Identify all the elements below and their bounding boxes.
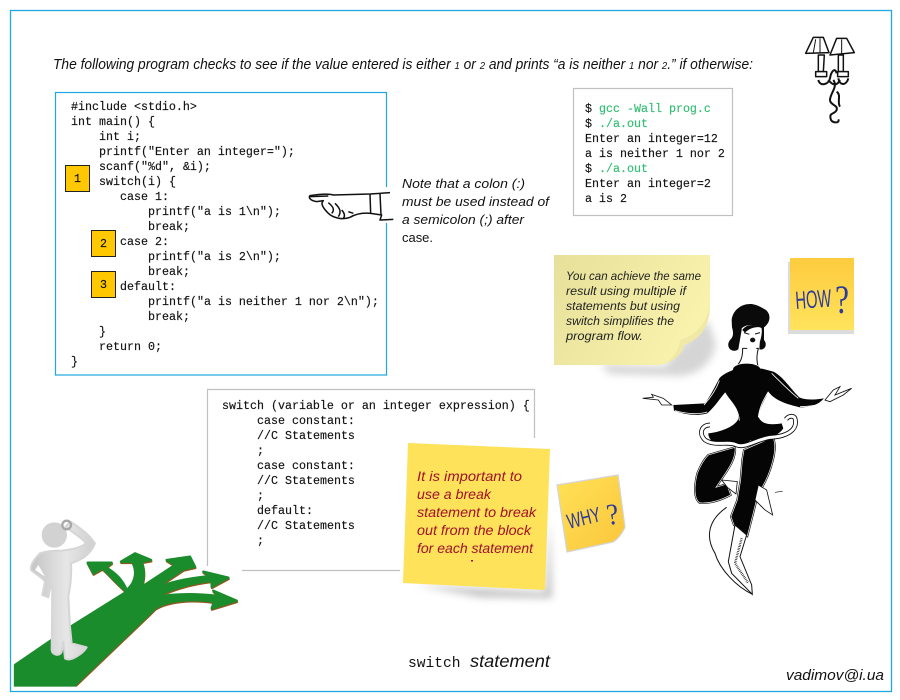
- badge 1: [66, 166, 90, 192]
- panel: program code: case 1:: [120, 190, 169, 204]
- icon: wall lamp: [806, 37, 854, 122]
- note about colon: must be used instead of: [402, 194, 550, 209]
- author email: vadimov@i.ua: [786, 667, 884, 684]
- panel: program code: #include <stdio.h>: [71, 100, 197, 114]
- sticky note: break: [403, 443, 552, 598]
- badge 2: 2: [100, 237, 107, 251]
- intro sentence: The following program checks to see if the value entered is either 1 or 2 and prints “a is neither 1 nor 2.” if otherwise:: [53, 57, 753, 73]
- sticky note: same result: result using multiple if: [566, 284, 688, 298]
- panel: switch syntax: case constant:: [257, 459, 355, 473]
- caption: statement: [470, 651, 551, 671]
- panel: switch syntax: default:: [257, 504, 313, 518]
- panel: program code: [56, 92, 386, 375]
- panel: switch syntax: ;: [257, 534, 264, 548]
- sticky note: HOW: [788, 258, 854, 334]
- panel: program code: printf("Enter an integer=");: [99, 145, 295, 159]
- panel: terminal output: Enter an integer=2: [585, 177, 711, 191]
- panel: terminal output: a is neither 1 nor 2: [585, 147, 725, 161]
- sticky note: break: for each statement: [417, 540, 534, 556]
- caption: [408, 651, 551, 672]
- sticky note: HOW: HOW: [794, 285, 833, 315]
- panel: terminal output: $ gcc -Wall prog.c: [585, 102, 711, 116]
- panel: program code: switch(i) {: [99, 175, 176, 189]
- panel: program code: break;: [148, 310, 190, 324]
- panel: switch syntax: //C Statements: [257, 429, 355, 443]
- panel: switch syntax: //C Statements: [257, 519, 355, 533]
- sticky note: WHY: ?: [604, 498, 621, 532]
- note about colon: [402, 176, 550, 245]
- caption: switch: [408, 656, 461, 672]
- sticky note: HOW: ?: [835, 277, 849, 322]
- sticky note: same result: switch simplifies the: [566, 314, 674, 328]
- sticky note: break: use a break: [417, 486, 492, 502]
- panel: switch syntax: switch (variable or an integer expression) {: [222, 399, 530, 413]
- sticky note: WHY: WHY: [565, 503, 603, 534]
- panel: switch syntax: case constant:: [257, 414, 355, 428]
- panel: program code: case 2:: [120, 235, 169, 249]
- sticky note: same result: [554, 255, 716, 376]
- note about colon: a semicolon (;) after: [402, 212, 525, 227]
- illustration: man at the crossroads: [13, 521, 237, 691]
- badge 1: 1: [74, 172, 81, 186]
- panel: switch syntax: ;: [257, 489, 264, 503]
- panel: program code: printf("a is neither 1 nor 2\n");: [148, 295, 379, 309]
- panel: terminal output: $ ./a.out: [585, 117, 648, 131]
- panel: program code: int i;: [99, 130, 141, 144]
- panel: terminal output: a is 2: [585, 192, 627, 206]
- sticky note: break: statement to break: [417, 504, 537, 520]
- illustration: woman skating: [643, 304, 852, 594]
- panel: switch syntax: [208, 390, 534, 570]
- panel: program code: int main() {: [71, 115, 155, 129]
- panel: terminal output: $ ./a.out: [585, 162, 648, 176]
- panel: program code: return 0;: [99, 340, 162, 354]
- panel: program code: }: [71, 355, 78, 369]
- badge 3: [92, 272, 116, 298]
- panel: program code: break;: [148, 220, 190, 234]
- sticky note: break: out from the block: [417, 522, 532, 538]
- sticky note: WHY: [557, 475, 625, 552]
- note about colon: case.: [402, 230, 433, 245]
- sticky note: same result: program flow.: [565, 329, 643, 343]
- sticky note: same result: You can achieve the same: [566, 269, 701, 283]
- panel: program code: printf("a is 1\n");: [148, 205, 281, 219]
- panel: program code: scanf("%d", &i);: [99, 160, 211, 174]
- panel: program code: printf("a is 2\n");: [148, 250, 281, 264]
- icon: pointing hand: [309, 187, 393, 223]
- panel: terminal output: Enter an integer=12: [585, 132, 718, 146]
- sticky note: break: It is important to: [417, 468, 522, 484]
- panel: program code: break;: [148, 265, 190, 279]
- panel: program code: default:: [120, 280, 176, 294]
- note about colon: Note that a colon (:): [402, 176, 525, 191]
- panel: switch syntax: ;: [257, 444, 264, 458]
- sticky note: same result: statements but using: [566, 299, 680, 313]
- panel: switch syntax: //C Statements: [257, 474, 355, 488]
- badge 2: [92, 230, 116, 256]
- panel: program code: }: [99, 325, 106, 339]
- badge 3: 3: [100, 278, 107, 292]
- panel: terminal output: [574, 88, 732, 216]
